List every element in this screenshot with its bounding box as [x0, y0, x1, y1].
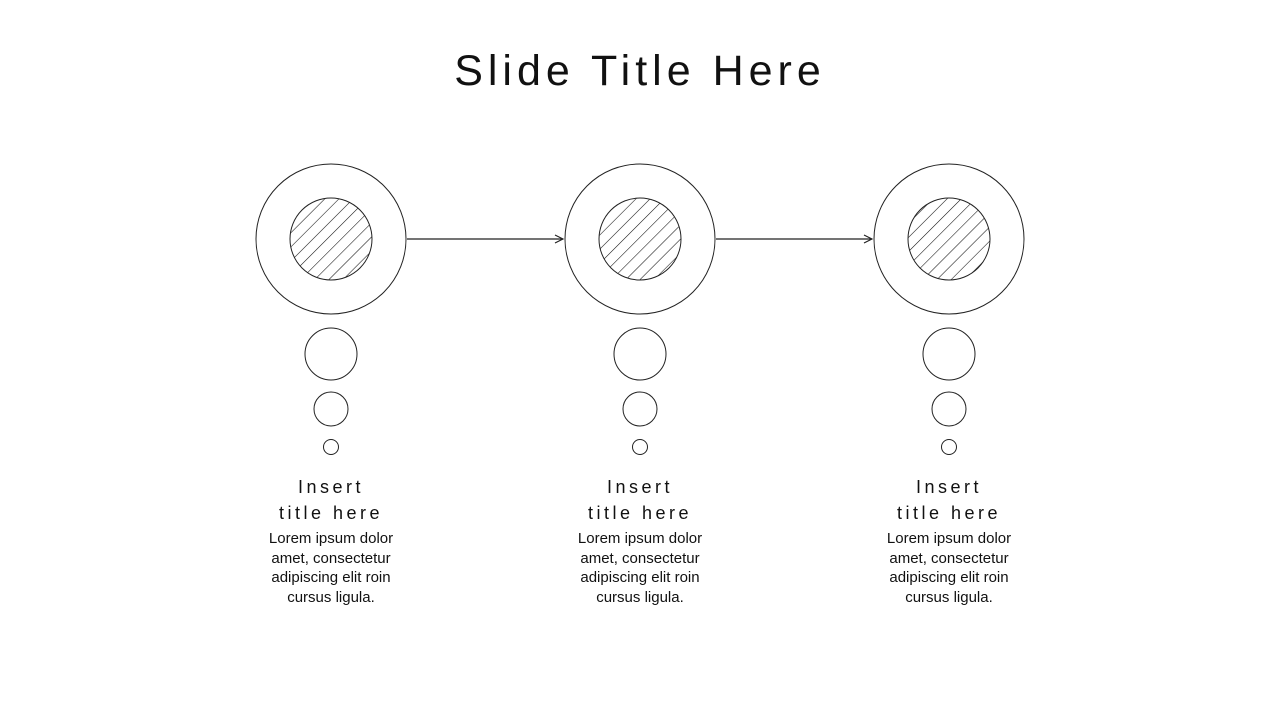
caption 2: Lorem ipsum dolor — [578, 530, 702, 547]
caption 3: cursus ligula. — [905, 588, 993, 606]
caption 3: Lorem ipsum dolor — [887, 530, 1011, 547]
caption 2: cursus ligula. — [596, 588, 684, 606]
caption 3: adipiscing elit roin — [889, 569, 1009, 586]
step 2 graphic — [565, 164, 715, 454]
arrow 1 — [407, 238, 563, 240]
caption 2: adipiscing elit roin — [580, 569, 700, 586]
caption 1: Insert — [298, 477, 364, 497]
caption 1: title here — [279, 503, 383, 523]
caption 1 — [269, 477, 393, 606]
caption 1: Lorem ipsum dolor — [269, 530, 393, 547]
caption 2 — [578, 477, 702, 606]
caption 1: amet, consectetur — [271, 550, 391, 566]
arrow 2 — [716, 238, 872, 240]
caption 1: cursus ligula. — [287, 588, 375, 606]
caption 2: title here — [588, 503, 692, 523]
step 3 graphic — [874, 164, 1024, 454]
caption 3 — [887, 477, 1011, 606]
caption 2: Insert — [607, 477, 673, 497]
caption 3: Insert — [916, 477, 982, 497]
caption 1: adipiscing elit roin — [271, 569, 391, 586]
title: Slide Title Here — [454, 47, 826, 95]
caption 3: amet, consectetur — [889, 550, 1009, 566]
caption 3: title here — [897, 503, 1001, 523]
step 1 graphic — [256, 164, 406, 454]
caption 2: amet, consectetur — [580, 550, 700, 566]
